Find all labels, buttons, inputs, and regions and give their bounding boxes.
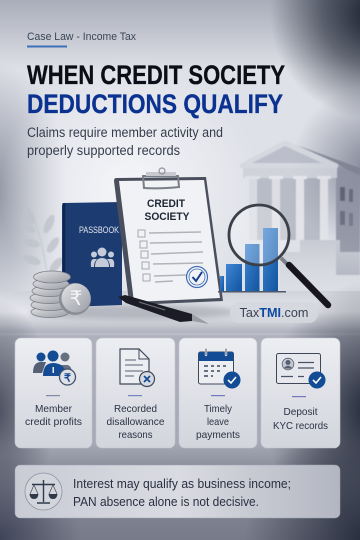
card: timely leave payments <box>179 338 257 448</box>
eyebrow label: Case Law - Income Tax <box>27 31 136 43</box>
title: DEDUCTIONS QUALIFY <box>27 89 283 119</box>
illustration: coin stack <box>30 271 91 318</box>
label <box>106 403 165 441</box>
card: deposit KYC records <box>261 338 340 448</box>
subtitle: properly supported records <box>27 143 180 158</box>
illustration: pen <box>118 295 209 324</box>
label: payments <box>196 429 240 441</box>
label: Timely <box>204 403 233 415</box>
illustration: clipboard: SOCIETY <box>144 211 190 223</box>
label <box>273 406 328 432</box>
label <box>196 403 240 441</box>
illustration: floor shadow <box>30 305 240 319</box>
illustration: faded plant <box>19 206 65 280</box>
icon: scales of justice <box>25 473 62 510</box>
logo pill: TaxTMI.com <box>240 305 308 320</box>
label: KYC records <box>273 420 328 432</box>
illustration: magnifying glass <box>229 205 328 305</box>
callout: conclusion <box>15 465 340 518</box>
illustration: clipboard: CREDIT <box>147 198 185 210</box>
illustration: clipboard <box>114 168 223 305</box>
title <box>27 60 285 119</box>
label: Recorded <box>114 403 157 415</box>
illustration: bar chart <box>218 228 286 292</box>
label <box>25 403 82 428</box>
icon: ID card with check <box>276 354 326 388</box>
icon: members with rupee: ₹ <box>64 372 71 384</box>
illustration: coin stack: ₹ <box>70 288 82 310</box>
label: leave <box>207 416 229 428</box>
label: Deposit <box>284 406 318 418</box>
card: member credit profits <box>15 338 92 448</box>
card: recorded disallowance reasons <box>96 338 175 448</box>
callout text: PAN absence alone is not decisive. <box>73 495 259 509</box>
subtitle <box>27 125 223 158</box>
label: disallowance <box>106 416 165 428</box>
label: reasons <box>118 429 152 441</box>
icon: calendar with check <box>198 349 240 388</box>
callout text <box>73 477 291 509</box>
logo pill <box>230 302 318 323</box>
label: credit profits <box>25 416 82 428</box>
title: WHEN CREDIT SOCIETY <box>27 60 285 90</box>
illustration: courthouse building <box>240 140 360 291</box>
icon: document with x <box>120 349 154 386</box>
illustration: passbook: PASSBOOK <box>79 225 119 235</box>
callout text: Interest may qualify as business income; <box>73 477 291 491</box>
illustration: passbook <box>62 202 122 307</box>
subtitle: Claims require member activity and <box>27 125 223 140</box>
label: Member <box>35 403 72 415</box>
